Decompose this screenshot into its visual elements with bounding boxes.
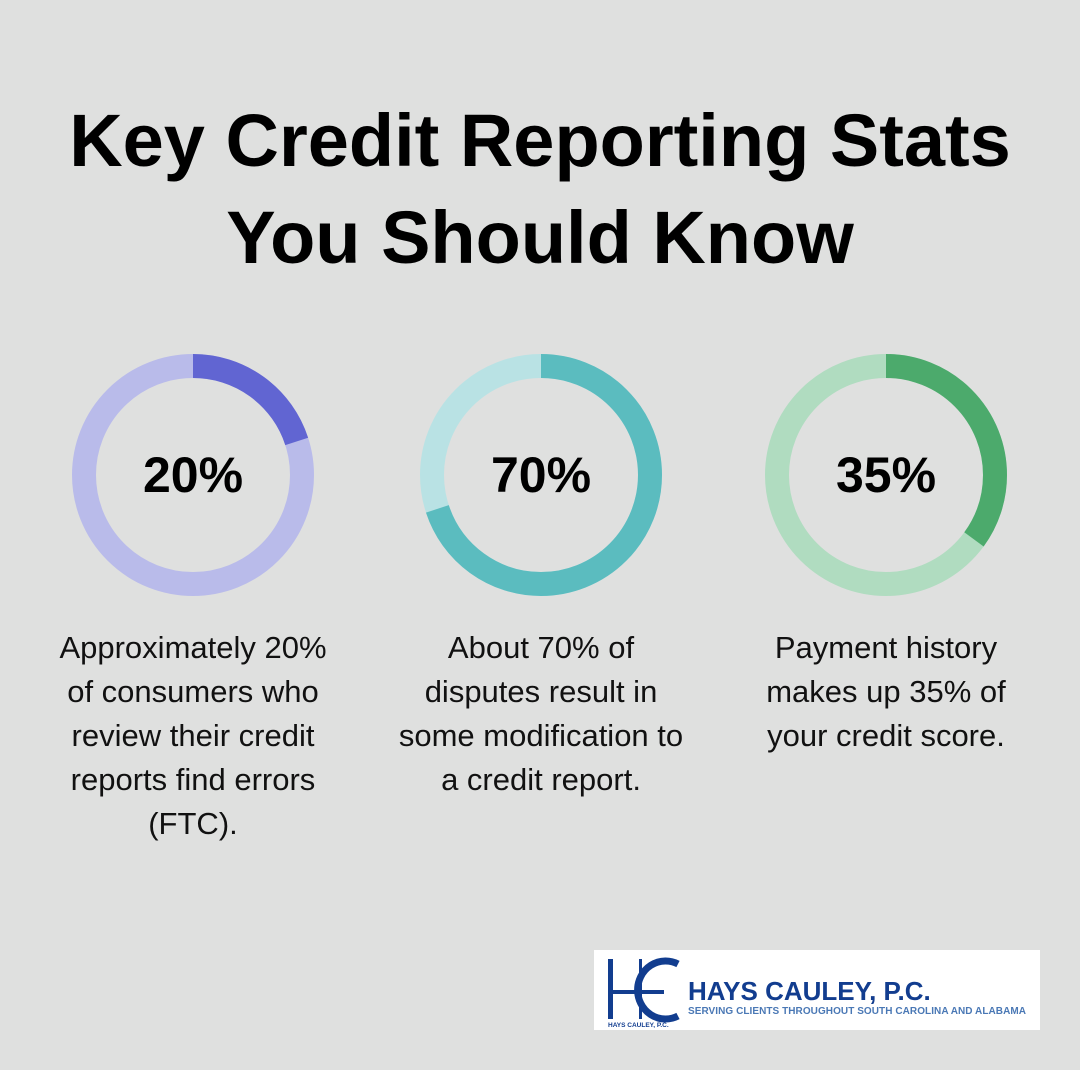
text: a credit report. bbox=[441, 762, 641, 797]
logo: SERVING CLIENTS THROUGHOUT SOUTH CAROLINA AND ALABAMA bbox=[688, 1006, 1026, 1017]
title bbox=[69, 99, 1011, 279]
text: disputes result in bbox=[425, 674, 657, 709]
title: You Should Know bbox=[226, 196, 854, 279]
text: review their credit bbox=[72, 718, 314, 753]
text: makes up 35% of bbox=[766, 674, 1006, 709]
text: your credit score. bbox=[767, 718, 1005, 753]
stat 3: donut 35% bbox=[765, 354, 1007, 753]
logo: HAYS CAULEY, P.C. bbox=[608, 1022, 669, 1029]
text: About 70% of bbox=[448, 630, 634, 665]
text: some modification to bbox=[399, 718, 683, 753]
text: (FTC). bbox=[148, 806, 238, 841]
title: Key Credit Reporting Stats bbox=[69, 99, 1011, 182]
text: of consumers who bbox=[67, 674, 319, 709]
text: 20% bbox=[143, 447, 243, 503]
logo: HAYS CAULEY, P.C. bbox=[688, 976, 931, 1006]
text: Payment history bbox=[775, 630, 997, 665]
text: 70% bbox=[491, 447, 591, 503]
stat 1: donut 20% bbox=[59, 354, 327, 841]
stat 2: donut 70% bbox=[399, 354, 683, 797]
text: reports find errors bbox=[71, 762, 315, 797]
text: Approximately 20% bbox=[59, 630, 327, 665]
logo bbox=[594, 950, 1040, 1030]
text: 35% bbox=[836, 447, 936, 503]
